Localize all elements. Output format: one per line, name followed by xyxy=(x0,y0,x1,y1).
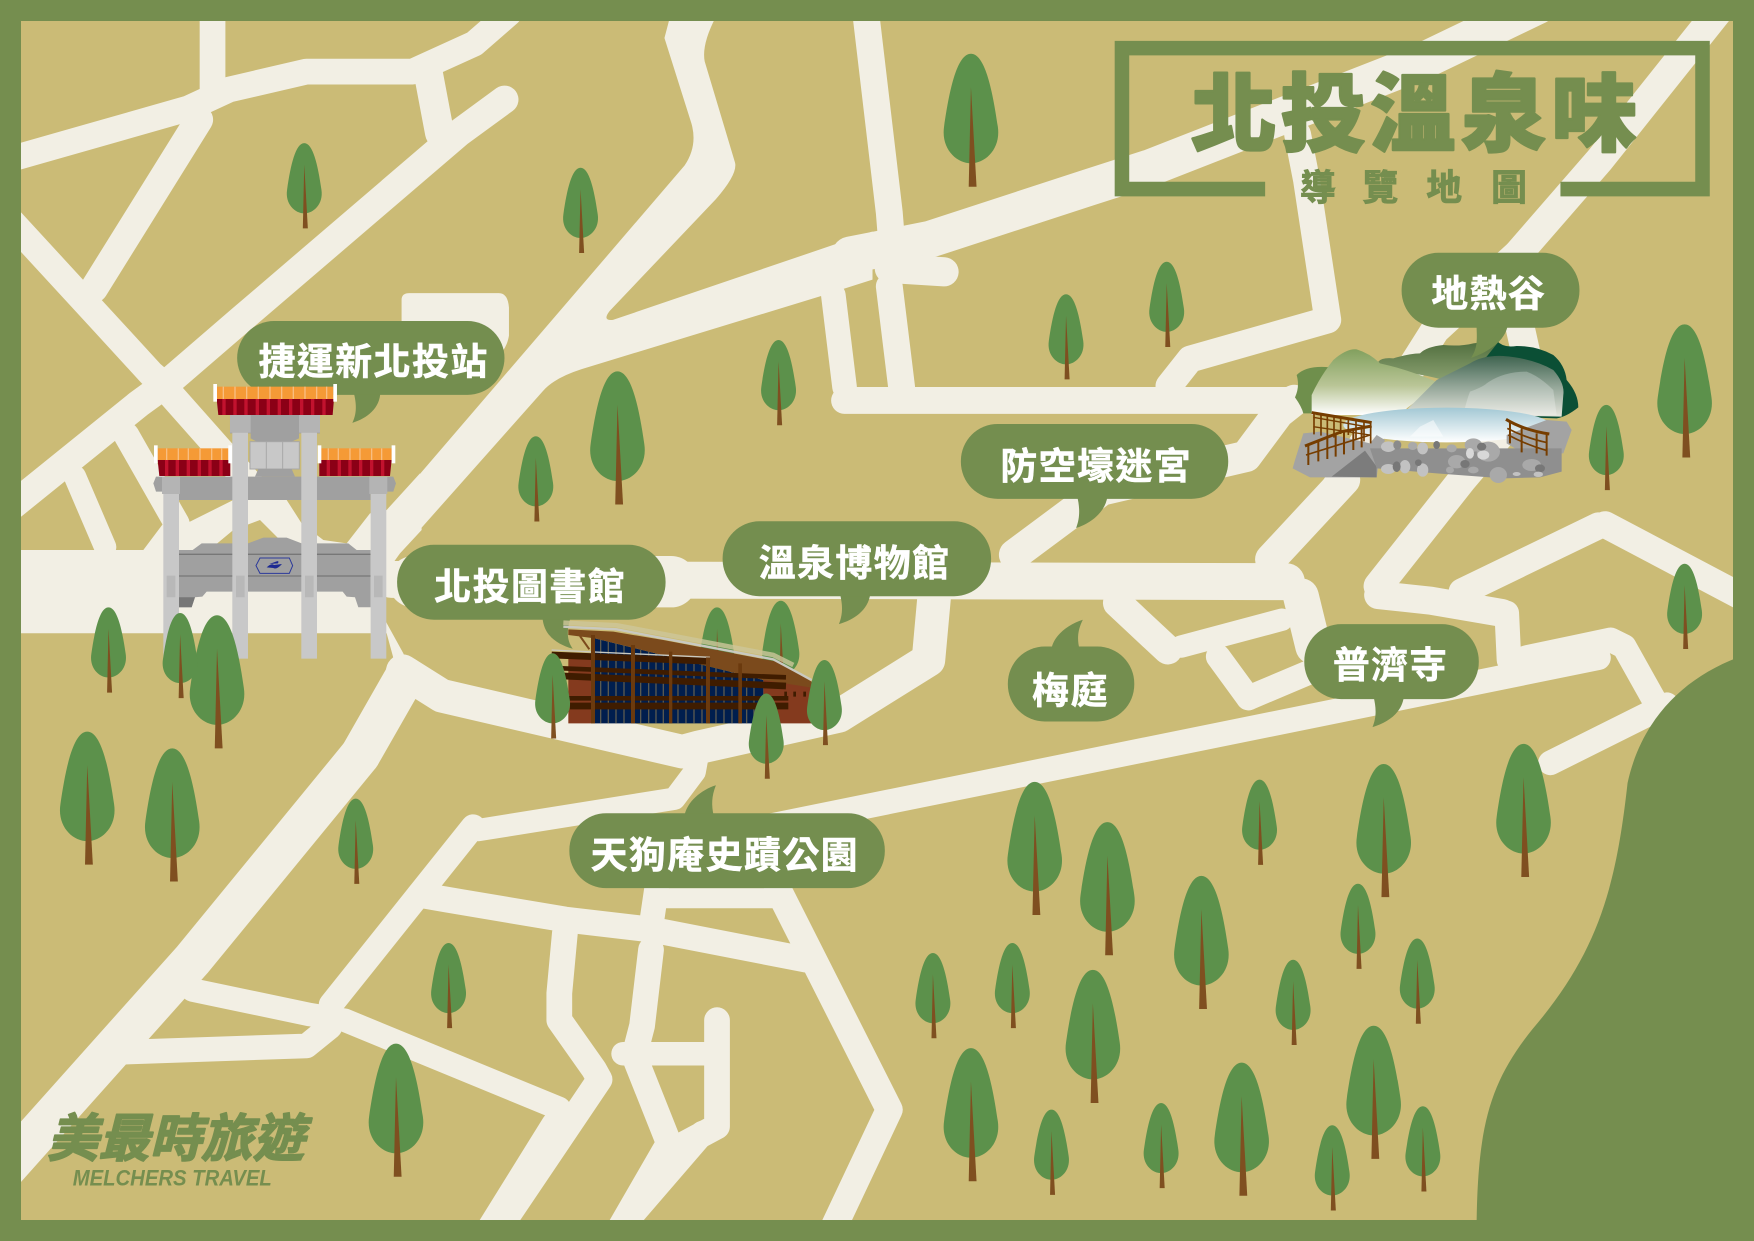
bubble: 防空壕迷宮 xyxy=(961,424,1228,528)
left roof xyxy=(154,445,232,476)
illustration: Beitou thermal valley xyxy=(1293,340,1578,483)
main title: 北投溫泉味 xyxy=(1191,68,1637,163)
title frame xyxy=(1122,48,1703,189)
bubble: 捷運新北投站 xyxy=(237,321,504,423)
title block xyxy=(1122,48,1703,208)
illustration: Beitou library xyxy=(552,623,812,723)
hill: bottom-right corner xyxy=(1477,652,1754,1241)
bubble: 北投圖書館 xyxy=(397,545,666,649)
road junction area behind gate xyxy=(20,473,422,670)
right roof xyxy=(318,445,395,476)
brand name english: MELCHERS TRAVEL xyxy=(73,1166,272,1191)
bubble: 天狗庵史蹟公園 xyxy=(569,785,885,888)
brand name chinese: 美最時旅遊 xyxy=(47,1110,313,1168)
bubble: 普濟寺: 普濟寺 xyxy=(1333,645,1448,686)
bubble: 北投圖書館: 北投圖書館 xyxy=(434,567,626,608)
bubble: 溫泉博物館: 溫泉博物館 xyxy=(759,543,951,584)
bubble: 梅庭 xyxy=(1008,620,1134,721)
bubble: 梅庭: 梅庭 xyxy=(1032,671,1109,712)
illustration: Xinbeitou station gate xyxy=(153,384,396,659)
bubble: 防空壕迷宮: 防空壕迷宮 xyxy=(1000,446,1192,487)
bubble: 捷運新北投站: 捷運新北投站 xyxy=(259,342,489,383)
trees behind landmarks xyxy=(700,601,799,693)
subtitle: 導覽地圖 xyxy=(1300,168,1527,208)
bubble: 普濟寺 xyxy=(1304,624,1479,727)
bubble: 地熱谷: 地熱谷 xyxy=(1431,273,1546,314)
top roof xyxy=(213,384,337,415)
bubble: 天狗庵史蹟公園: 天狗庵史蹟公園 xyxy=(591,835,859,876)
bubble: 溫泉博物館 xyxy=(723,521,991,624)
brand logo xyxy=(47,1110,313,1191)
bubble: 地熱谷 xyxy=(1402,253,1579,358)
